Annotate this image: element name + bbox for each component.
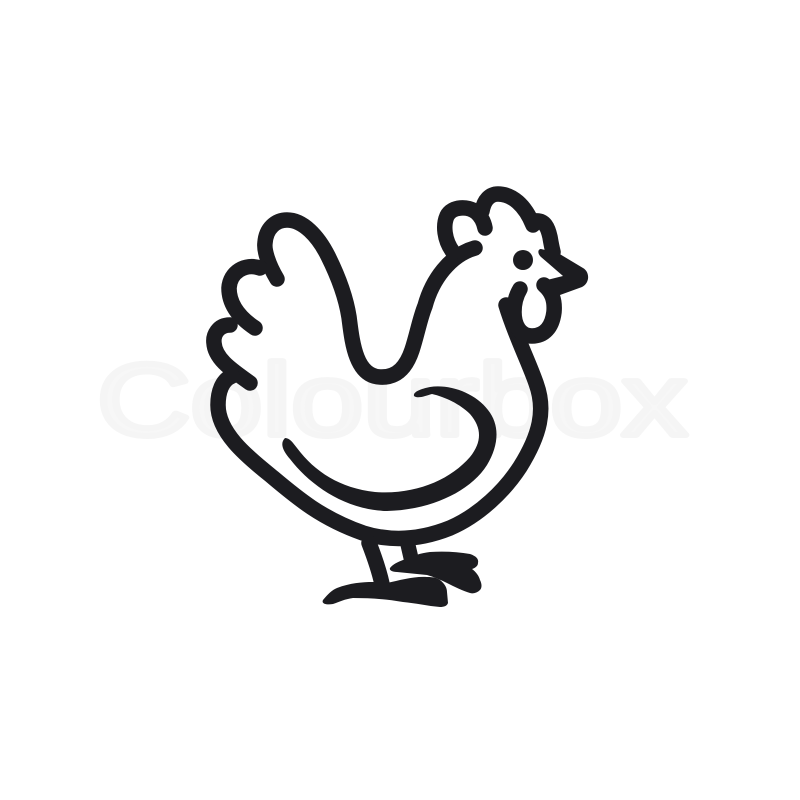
- inner wing swoosh: [282, 386, 497, 511]
- eye: [513, 250, 533, 270]
- beak: [538, 249, 588, 296]
- wattle: [514, 285, 554, 336]
- leg right: [408, 545, 411, 558]
- watermark text: Colourbox: [97, 343, 687, 457]
- tail feather lower: [214, 325, 250, 383]
- icon: chicken: [214, 194, 554, 584]
- tail feather middle: [229, 267, 260, 328]
- comb top lobe: [482, 194, 533, 225]
- foot right: [390, 552, 482, 593]
- comb back lobe: [445, 208, 485, 252]
- foot left: [323, 577, 448, 607]
- wing, back and neck outline: [265, 220, 475, 377]
- comb front lobe: [535, 221, 553, 252]
- leg left: [369, 543, 382, 584]
- body outline: [218, 305, 541, 538]
